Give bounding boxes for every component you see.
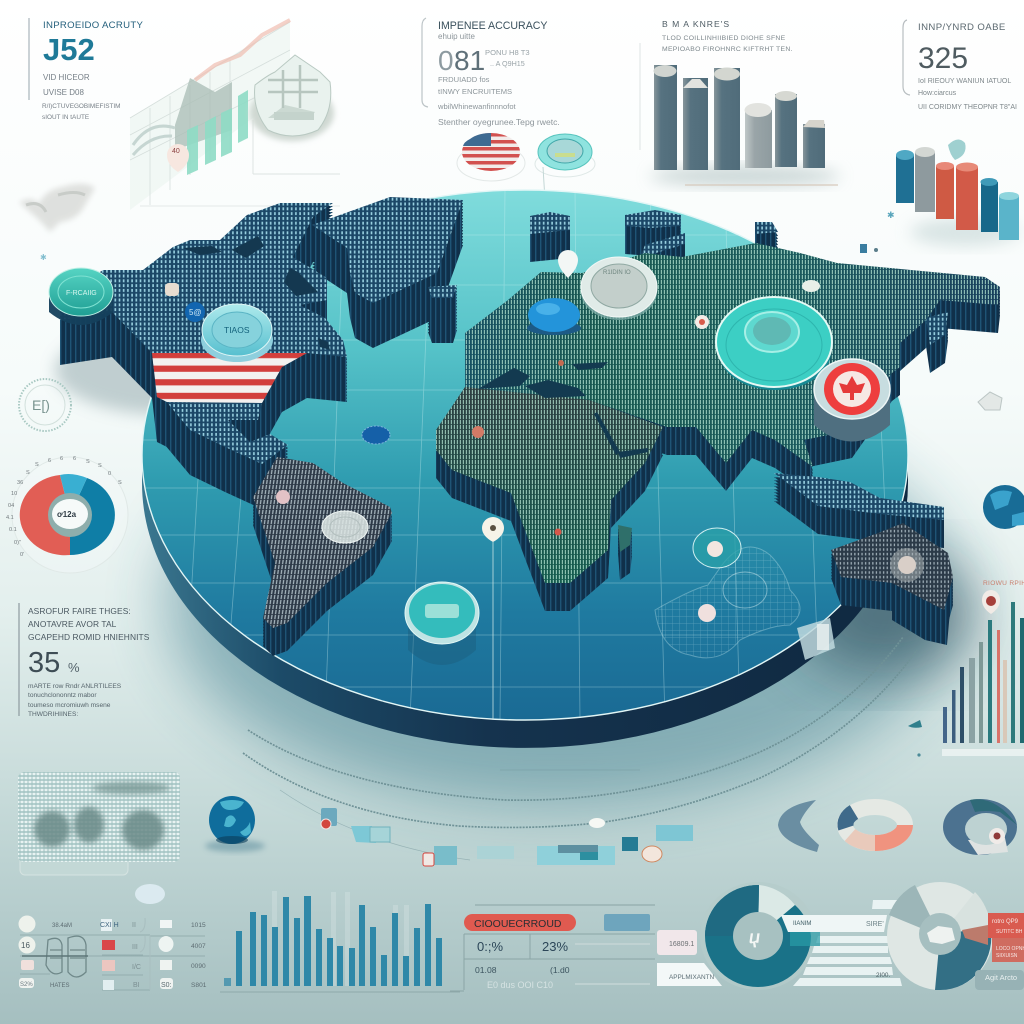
disc top <box>142 190 908 720</box>
text block: left details: mARTE row Rndr ANLRTILEES <box>28 683 122 690</box>
text block: accuracy details: tINWY ENCRUITEMS <box>438 87 512 96</box>
panel: column chart top-center: B M A KNRE'S <box>662 19 730 29</box>
lid: teal south atlantic <box>405 582 479 665</box>
pin: blue circle <box>185 302 205 322</box>
panel: bottom-left icon table: S2% <box>20 982 33 988</box>
text block: top-right details: How:ciarcus <box>918 90 957 97</box>
panel: top-left stat <box>29 18 144 121</box>
text block: left details: THWDRIHIINES: <box>28 711 78 718</box>
text block: top-right details: UII CORIDMY THEOPNR T8"AI <box>918 104 1017 111</box>
icon: blue globe <box>205 796 265 852</box>
donut scale labels: 6 <box>48 458 51 464</box>
red labels: rotro QP9 <box>992 919 1019 925</box>
panel: top-center accuracy: 81 <box>454 45 485 76</box>
land extrusion <box>60 200 1000 656</box>
icon: globe hands <box>46 936 86 977</box>
heading: left stat: GCAPEHD ROMID HNIEHNITS <box>28 632 150 642</box>
panel: bottom-left icon table <box>18 884 207 990</box>
panel: column chart top-center <box>640 19 840 186</box>
pin: ocean blue chip <box>362 426 390 444</box>
heading: top-right: INNP/YNRD OABE <box>918 22 1006 33</box>
donut scale labels: 4.1 <box>6 515 14 521</box>
panel: Cloudbackground table <box>450 905 722 991</box>
icon: grey relief map: ✱ <box>40 253 47 262</box>
donut scale labels: 36 <box>17 480 23 486</box>
bar columns <box>654 65 825 170</box>
white label <box>657 963 722 986</box>
icon: logo ring <box>19 379 71 431</box>
pin: small tan <box>165 283 179 296</box>
donut scale labels: 6 <box>60 456 63 462</box>
lid: TIAOS <box>201 304 273 362</box>
donut scale labels: 04 <box>8 503 14 509</box>
chart: pastel donut <box>845 807 905 843</box>
land: north america <box>60 197 948 520</box>
panel: bottom-left icon table: I/C <box>132 964 141 971</box>
icon: blue dome <box>527 298 581 335</box>
chart: teal donut with bands: IIANIM <box>793 921 811 927</box>
lid: grey europe <box>581 257 657 320</box>
pin <box>982 590 1000 614</box>
chart: teal donut with bands: 2I00. <box>876 972 890 979</box>
text block: top-left details: UVISE D08 <box>43 88 84 97</box>
text block: top-left details: sIOUT IN tAUTE <box>42 114 89 121</box>
panel: column chart top-center: TLOD COILLINHIIBIED DIOHE SFNE <box>662 35 786 42</box>
chart: teal donut with bands: SIRE' <box>866 921 884 928</box>
lid: glass indian ocean <box>693 528 741 568</box>
donut scale labels: 10 <box>11 491 17 497</box>
chart: blue donut <box>943 799 1017 855</box>
text block: accuracy details: FRDUIADD fos <box>438 75 490 84</box>
panel: bottom-left icon table: III <box>132 944 138 951</box>
text block: top-right details: IoI RIEOUY WANIUN IATUOL <box>918 78 1011 85</box>
text block: accuracy details: wbilWhinewanfinnnofot <box>437 102 517 111</box>
lid: red maple flag <box>814 359 890 442</box>
pin: blue circle: 5@ <box>189 308 202 317</box>
text block: left details: tonuchclononntz mabor <box>28 692 97 699</box>
panel: bottom-left icon table: 4007 <box>191 943 206 950</box>
icon: cyan lid <box>535 134 595 200</box>
right column chips <box>160 920 172 928</box>
red labels: SUTITC BH <box>996 929 1023 935</box>
land: africa <box>436 387 663 583</box>
pin: map markers <box>276 250 924 720</box>
dashed orbit arcs <box>243 637 917 860</box>
icons: chips along orbit <box>321 808 693 866</box>
world map disc <box>60 190 1000 748</box>
mid column chips <box>101 919 112 931</box>
chart: teal donut with bands: ⴤ <box>749 928 760 948</box>
land: eurasia <box>465 243 1000 467</box>
panel: bottom-left icon table: II <box>132 922 136 929</box>
heading: left stat: ANOTAVRE AVOR TAL <box>28 619 117 629</box>
stat: 35%: 35 <box>28 647 60 679</box>
text block: left details <box>28 683 122 718</box>
chart: grey donut with red labels <box>887 882 1024 990</box>
text block: top-left details: R/I)CTUVEGOBIMEFISTIM <box>42 103 120 110</box>
panel: bottom-left icon table: 1015 <box>191 922 206 929</box>
white chip <box>657 930 697 955</box>
icons: floating bits near asia <box>860 210 1002 410</box>
panel: left stat 35%: % <box>68 660 80 675</box>
faint mesh continent <box>655 547 800 658</box>
text block: top-left details: VID HICEOR <box>43 73 90 82</box>
panel: top-center accuracy <box>422 18 560 127</box>
text block: left details: toumeso mcromiuwh msene <box>28 702 111 709</box>
panel: bottom-left icon table: S801 <box>191 982 207 989</box>
land: inland seas <box>478 362 648 458</box>
panel: left stat 35% <box>19 603 150 718</box>
red labels: SIIXUISN <box>996 953 1018 959</box>
text block: accuracy details <box>437 75 560 127</box>
red pill: CIOOUECRROUD <box>474 918 562 930</box>
land: south america <box>253 457 392 628</box>
panel: Cloudbackground table: 23% <box>542 939 568 954</box>
heading: left stat: ASROFUR FAIRE THGES: <box>28 606 131 616</box>
land: USA flag <box>152 353 307 403</box>
icon: US flag disc <box>457 133 525 181</box>
panel: bottom-left icon table: 0090 <box>191 963 206 970</box>
disc grid <box>140 190 910 720</box>
text block: accuracy details: Stenther oyegrunee.Tepg rwetc. <box>438 117 560 127</box>
panel: Cloudbackground table: (1.d0 <box>550 965 570 975</box>
panel: top-center accuracy: .. A Q9H15 <box>490 59 525 68</box>
panel: top-center accuracy: ehuip uitte <box>438 32 475 41</box>
text block: top-right details <box>918 78 1017 111</box>
red pill <box>464 914 576 931</box>
grey label: Agit Arcto <box>985 973 1017 982</box>
donut scale labels: S <box>98 463 102 469</box>
chart: coloured 3D bars top-right <box>896 139 1020 246</box>
panel: bottom-left icon table: HATES <box>50 983 70 989</box>
heading: accuracy: IMPENEE ACCURACY <box>438 20 548 32</box>
right edge globe <box>983 485 1024 529</box>
panel: bottom-left icon table: BI <box>133 982 140 989</box>
donut scale labels: S <box>118 480 122 486</box>
donut scale labels: 6 <box>73 456 76 462</box>
white label: APPLMIXANTN <box>669 974 714 981</box>
donut scale labels: S <box>86 459 90 465</box>
lid: Alaska teal <box>49 268 113 325</box>
donut scale labels: 0.1 <box>9 527 17 533</box>
panel: bottom-left icon table: 38.4aM <box>52 923 72 929</box>
chart: crescent <box>778 800 819 852</box>
icon: grey relief map <box>19 184 95 262</box>
white chip: 16809.1 <box>669 941 694 948</box>
heading: top-left: INPROEIDO ACRUTY <box>43 20 144 31</box>
stat: 352: J52 <box>43 32 95 67</box>
donut scale labels: S <box>35 462 39 468</box>
icon: pin 40: 40 <box>172 148 180 155</box>
stat: 325: 325 <box>918 42 968 75</box>
donut scale labels: 0' <box>20 552 24 558</box>
icon: glass shield <box>250 55 334 141</box>
disc shadow <box>55 325 975 805</box>
chart: red and blue donut <box>6 456 128 573</box>
donut scale labels: 0)" <box>14 540 21 546</box>
chart: perspective bars with shield <box>130 20 340 210</box>
land: australia <box>831 523 953 610</box>
lid: glass sphere on south america <box>322 511 368 543</box>
icon: small glass box on rim <box>797 618 835 660</box>
lid: large cyan <box>716 297 832 390</box>
panel: dotted mini map <box>18 772 180 875</box>
stat: 061: 0 <box>438 45 454 76</box>
donut scale labels <box>6 456 122 558</box>
donut label: ơ12a <box>57 510 77 519</box>
icon: logo ring: E[) <box>32 397 50 413</box>
chart: right thin bars <box>942 580 1024 756</box>
oval badge <box>135 884 165 904</box>
panel: bottom-left icon table: CXI H <box>100 922 119 929</box>
land: gaps in north america <box>183 236 330 350</box>
icon: pin 40 <box>167 144 189 172</box>
panel: Cloudbackground table: 01.08 <box>475 965 497 975</box>
donut scale labels: 0 <box>108 471 111 477</box>
panel: Cloudbackground table: E0 dus OOI C10 <box>487 980 553 990</box>
panel: bottom-left icon table: 16 <box>21 941 30 950</box>
panel: column chart top-center: MEPIOABO FIROHNRC KIFTRHT TEN. <box>662 46 793 53</box>
panel: top-center accuracy: PONU H8 T3 <box>485 48 530 57</box>
donut scale labels: S <box>26 470 30 476</box>
lid: grey europe: R1IDIN IO <box>603 270 631 276</box>
icon: floating teal drop <box>908 720 922 757</box>
heading: left stat <box>28 606 150 642</box>
lid: TIAOS: TIAOS <box>224 325 250 335</box>
chart: bottom blue bars <box>220 891 460 992</box>
chart: teal donut with bands <box>700 882 902 990</box>
text block: top-left details <box>42 73 120 121</box>
panel: Cloudbackground table: 0:;% <box>477 939 503 954</box>
red labels <box>988 913 1024 962</box>
lid: Alaska teal: F-RCAIIG <box>66 290 97 297</box>
panel: bottom-left icon table: S0: <box>161 982 172 989</box>
disc rim <box>142 455 908 748</box>
icons: floating bits near asia: ✱ <box>887 210 895 220</box>
panel: top-right stat 325 <box>903 20 1017 111</box>
